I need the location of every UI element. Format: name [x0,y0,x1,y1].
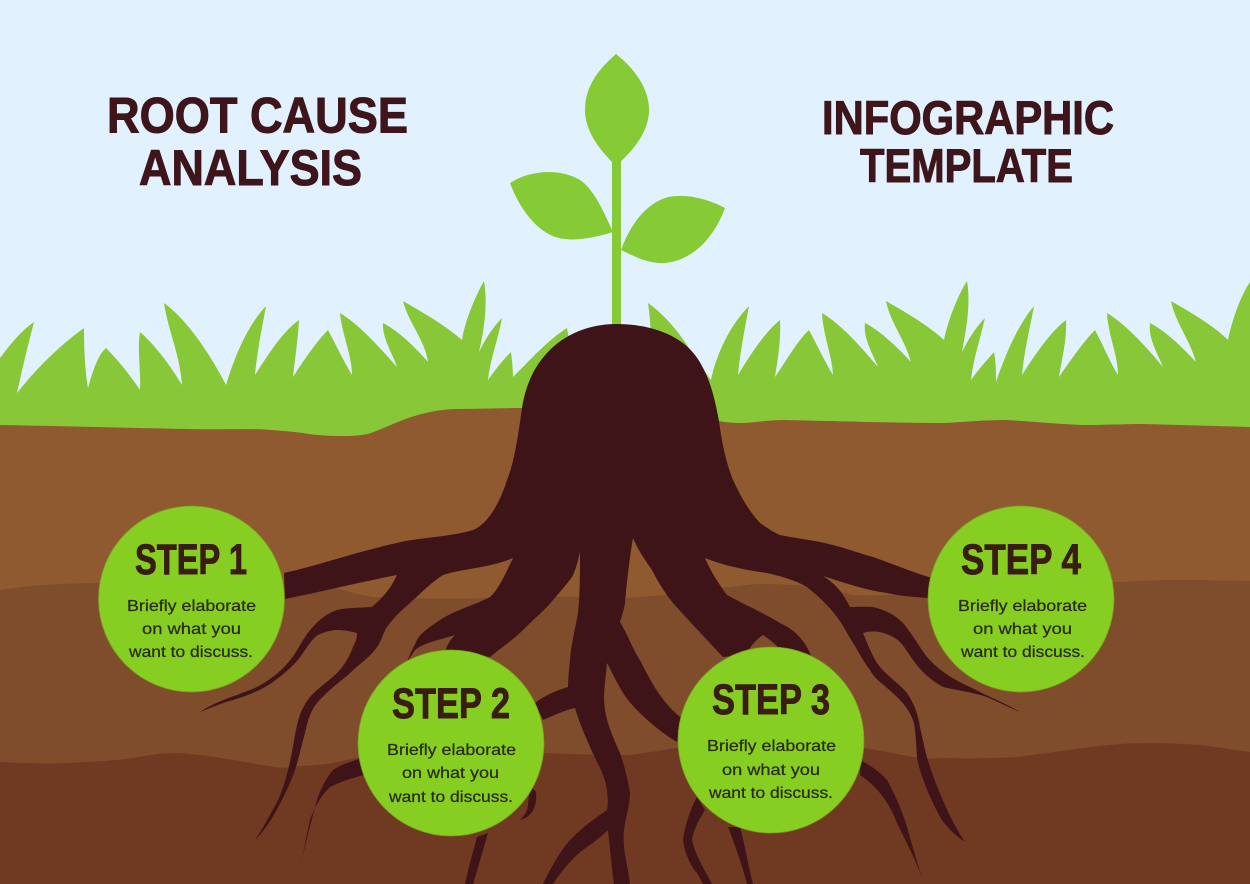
step 3 circle [678,647,864,833]
title: left: ROOT CAUSE [107,88,408,144]
step 3 circle: Briefly elaborate [707,738,836,755]
step 2 circle: on what you [402,765,499,782]
step 1 circle: on what you [142,621,241,638]
root: center column [535,520,690,884]
soil layer: top [0,408,1250,884]
title: right: INFOGRAPHIC [822,91,1114,144]
root: small rootlets around step 2 [297,758,536,884]
root: branch toward step 1 [284,530,510,599]
step 3 circle: STEP 3 [712,676,830,724]
step 2 circle [358,650,544,836]
step 1 circle: Briefly elaborate [127,598,256,615]
title: left [107,88,408,196]
tree roots [200,324,1020,884]
step 2 circle: Briefly elaborate [387,742,516,759]
step 4 circle: on what you [973,621,1072,638]
step 1 circle [98,506,284,692]
root: central stump [473,324,760,558]
title: left: ANALYSIS [139,140,362,196]
root: branch behind step 2 [407,530,580,662]
step 2 circle: STEP 2 [392,680,510,728]
step 2 circle: want to discuss. [388,789,513,806]
root: branches toward step 4 [690,480,1020,842]
root: lower left branches [200,535,513,840]
step 3 circle: on what you [722,762,820,779]
soil layer: middle [0,580,1250,884]
grass [0,281,1250,440]
root: branch behind step 3 [633,530,812,658]
step 1 circle: STEP 1 [135,536,247,584]
step 4 circle: STEP 4 [961,536,1081,584]
plant stem and leaves [510,54,725,340]
root: small rootlets around step 3 [683,760,922,884]
step 3 circle: want to discuss. [708,785,833,802]
step 1 circle: want to discuss. [128,644,253,661]
step 4 circle: Briefly elaborate [958,598,1087,615]
title: right: TEMPLATE [860,139,1073,192]
title: right [822,91,1114,192]
step 4 circle [928,506,1114,692]
soil layer: bottom [0,743,1250,884]
step 4 circle: want to discuss. [960,644,1085,661]
